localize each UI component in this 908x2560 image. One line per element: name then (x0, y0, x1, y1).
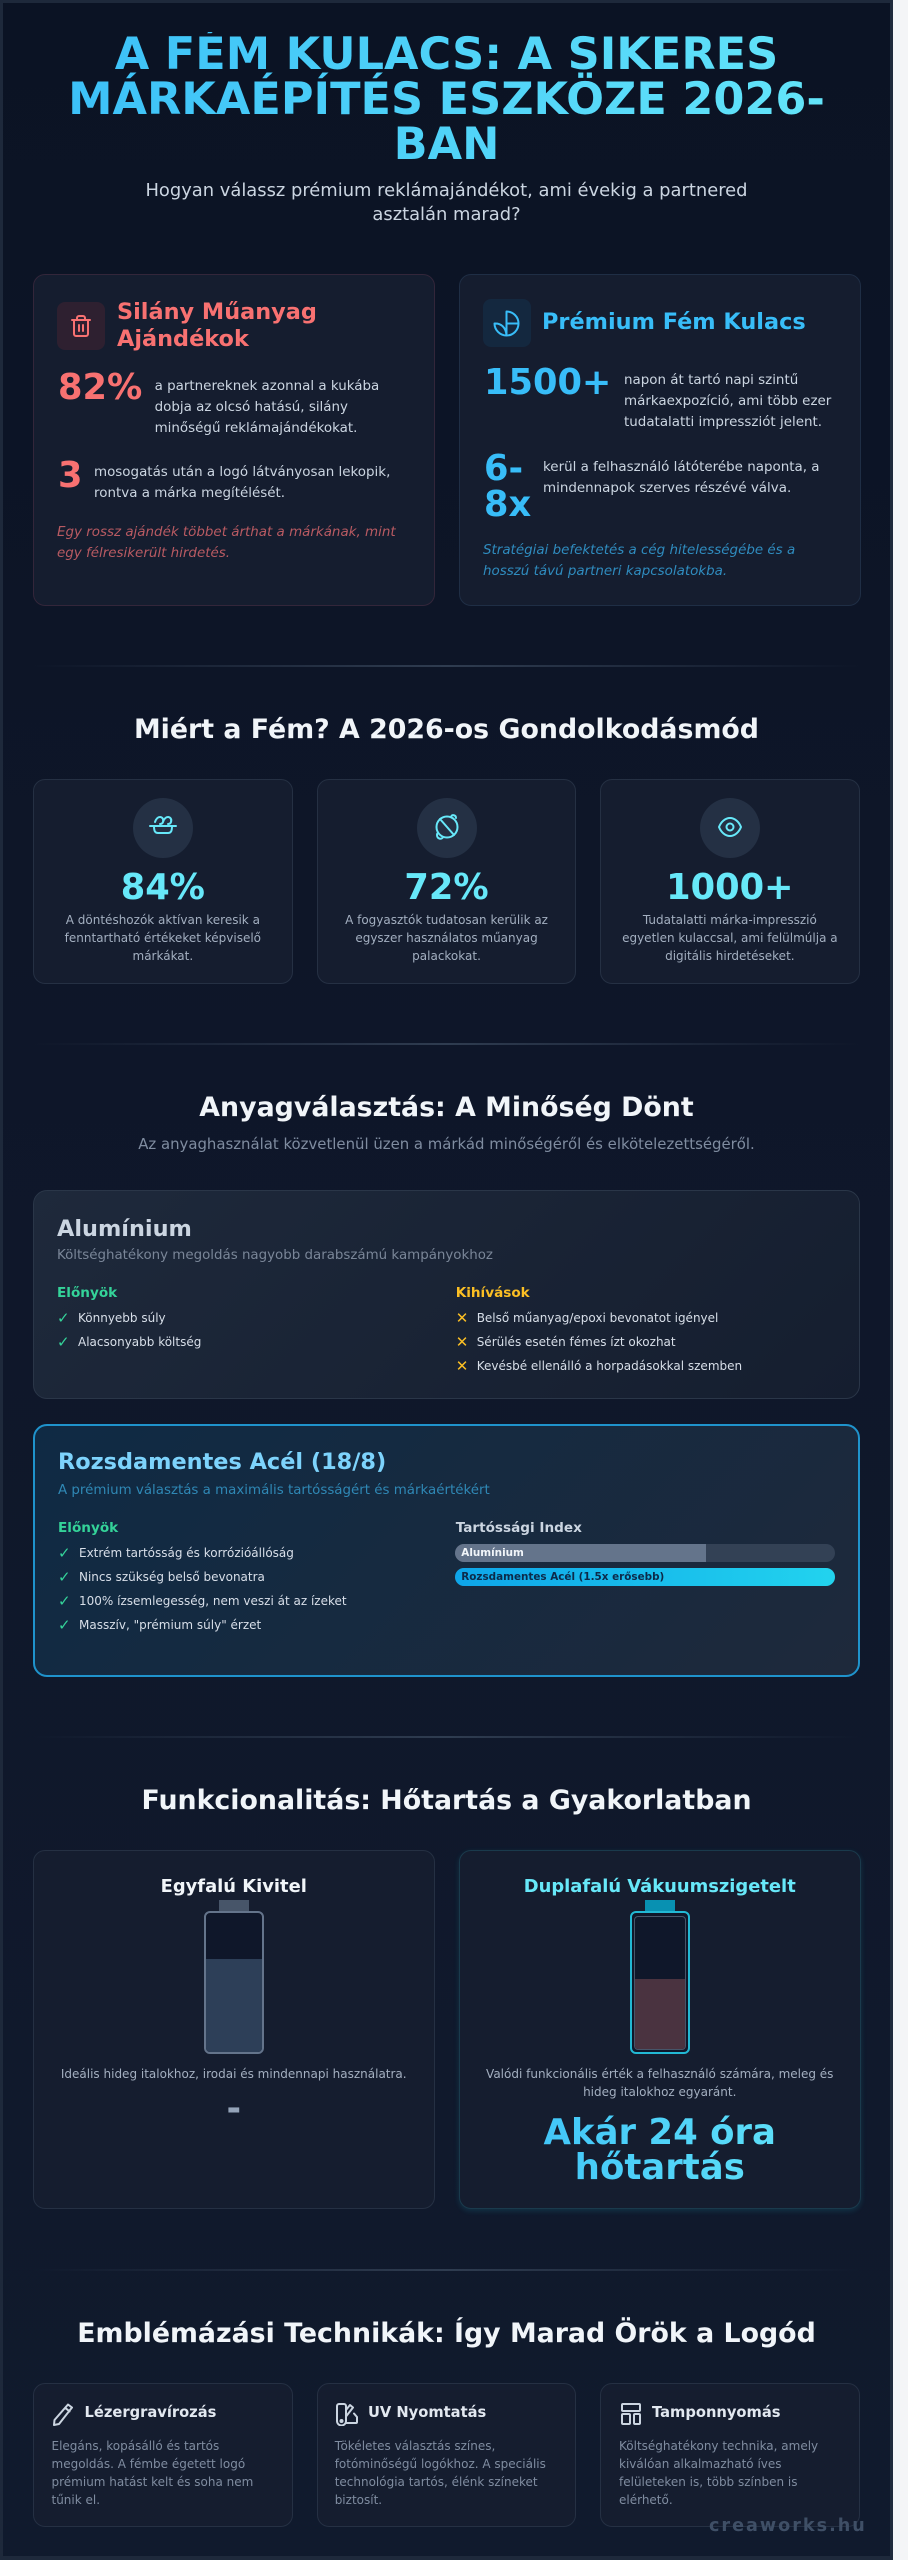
stat: 6-8x (484, 448, 531, 524)
list: kihívások: Sérülés esetén fémes ízt okozhat (477, 1335, 676, 1349)
heading: Prémium Fém Kulacs (542, 308, 806, 334)
bar: rozsdamentes acél: Rozsdamentes Acél (1.5x erősebb) (461, 1571, 664, 1583)
stat: 82%: 82% (58, 367, 142, 408)
description: technológia tartós, élénk színeket (335, 2475, 538, 2489)
title: Egyfalú Kivitel (161, 1876, 307, 1897)
list: előnyök: ✓ (57, 1333, 70, 1351)
list: előnyök: ✓ (57, 1309, 70, 1327)
icon: pen (53, 2404, 73, 2426)
card: uv nyomtatás (317, 2383, 576, 2527)
stat text: dobja az olcsó hatású, silány (155, 400, 348, 414)
description (486, 2067, 833, 2099)
description: elérhető. (619, 2493, 673, 2507)
title: UV Nyomtatás (368, 2404, 486, 2421)
description (622, 913, 838, 963)
durability heading: Tartóssági Index (456, 1520, 582, 1536)
list: kihívások: ✕ (456, 1309, 468, 1327)
icon: no plastic (417, 798, 477, 858)
stat text: minőségű reklámajándékokat. (155, 420, 357, 436)
card: lézergravírozás (33, 2383, 293, 2527)
list: előnyök: Előnyök (57, 1285, 117, 1301)
description: Ideális hideg italokhoz, irodai és mindennapi használatra. (61, 2067, 407, 2081)
panel: prémium fém kulacs (459, 274, 860, 606)
description: A döntéshozók aktívan keresik a (66, 913, 260, 927)
panel: rozsdamentes acél (33, 1424, 860, 1677)
heading: miért a fém: Miért a Fém? A 2026-os Gondolkodásmód (134, 714, 759, 744)
note: Stratégiai befektetés a cég hitelességébe és a (483, 542, 795, 558)
subheading: Az anyaghasználat közvetlenül üzen a márkád minőségéről és elkötelezettségéről. (138, 1135, 755, 1153)
list: kihívások: ✕ (456, 1357, 468, 1375)
number: 84% (121, 867, 205, 908)
list: előnyök: Extrém tartósság és korrózióállóság (79, 1546, 294, 1560)
subtitle: asztalán marad? (372, 204, 521, 225)
number: 1000+ (666, 867, 794, 908)
note: egy félresikerült hirdetés. (57, 546, 230, 560)
icon: recycling basin (133, 798, 193, 858)
title: Duplafalú Vákuumszigetelt (524, 1876, 796, 1897)
description (64, 913, 261, 963)
list: előnyök: ✓ (58, 1592, 71, 1610)
list: előnyök: Nincs szükség belső bevonatra (79, 1570, 265, 1584)
inner wall (634, 1916, 686, 2050)
stat text (94, 465, 390, 501)
description: Elegáns, kopásálló és tartós (52, 2439, 219, 2453)
subtitle: Hogyan válassz prémium reklámajándékot, ami évekig a partnered (145, 180, 748, 201)
body (204, 1911, 264, 2054)
title: A FÉM KULACS: A SIKERES (115, 28, 778, 80)
stat text (155, 378, 379, 436)
stat text: márkaexpozíció, ami több ezer (624, 394, 831, 408)
description: prémium hatást kelt és soha nem (52, 2475, 253, 2489)
liquid (206, 1959, 262, 2052)
number: 72% (404, 867, 489, 908)
big claim: hőtartás (575, 2147, 745, 2188)
list: kihívások: Belső műanyag/epoxi bevonatot igényel (477, 1311, 718, 1325)
title (0, 32, 893, 167)
description: Tökéletes választás színes, (335, 2439, 495, 2453)
stat: 1500+: 1500+ (484, 362, 611, 402)
stat text: kerül a felhasználó látóterébe naponta, a (543, 460, 820, 474)
bottle: single wall (204, 1900, 264, 2054)
heading: anyagválasztás: Anyagválasztás: A Minőség Dönt (199, 1092, 694, 1122)
description: digitális hirdetéseket. (665, 949, 795, 963)
description: egyszer használatos műanyag (355, 931, 538, 945)
description: Tudatalatti márka-impresszió (643, 913, 817, 927)
stat: 3: 3 (58, 455, 82, 496)
list: előnyök (58, 1520, 347, 1634)
list: kihívások: Kihívások (456, 1285, 530, 1301)
big claim (460, 2115, 860, 2185)
icon: eye (700, 798, 760, 858)
description: A fogyasztók tudatosan kerülik az (345, 913, 548, 927)
list: előnyök: Masszív, "prémium súly" érzet (79, 1618, 261, 1632)
title: Alumínium (57, 1216, 192, 1242)
heading: funkcionalitás: Funkcionalitás: Hőtartás a Gyakorlatban (141, 1784, 752, 1816)
body (630, 1911, 690, 2054)
stat text: a partnereknek azonnal a kukába (155, 378, 379, 394)
stat text: tudatalatti impressziót jelent. (624, 414, 822, 430)
description: fotóminőségű logókhoz. A speciális (335, 2457, 546, 2471)
icon: swatch (336, 2403, 358, 2426)
note (57, 524, 396, 560)
description (619, 2439, 818, 2507)
card: 72% (317, 779, 576, 984)
title: Rozsdamentes Acél (18/8) (58, 1449, 386, 1475)
icon: trash (57, 302, 105, 350)
card: 84% (33, 779, 293, 984)
card: 1000+ (600, 779, 860, 984)
note: hosszú távú partneri kapcsolatokba. (483, 564, 727, 578)
description: palackokat. (412, 949, 481, 963)
description: hideg italokhoz egyaránt. (583, 2085, 736, 2099)
description (52, 2439, 253, 2507)
heading: emblémázás: Emblémázási Technikák: Így Marad Örök a Logód (77, 2318, 816, 2348)
bar: rozsdamentes acél (455, 1568, 835, 1586)
description (334, 2439, 546, 2507)
title: Tamponnyomás (652, 2404, 780, 2421)
list: kihívások: Kevésbé ellenálló a horpadásokkal szemben (477, 1359, 742, 1373)
stat text: mosogatás után a logó látványosan lekopik, (94, 465, 390, 480)
list: kihívások (456, 1285, 742, 1375)
description: fenntartható értékeket képviselő (65, 931, 261, 945)
list: előnyök: ✓ (58, 1616, 71, 1634)
list: előnyök: ✓ (58, 1568, 71, 1586)
list: előnyök: ✓ (58, 1544, 71, 1562)
big claim: Akár 24 óra (543, 2112, 776, 2153)
description: Költséghatékony technika, amely (619, 2439, 818, 2453)
list: előnyök: 100% ízsemlegesség, nem veszi át az ízeket (79, 1594, 347, 1608)
subtitle: A prémium választás a maximális tartósságért és márkaértékért (58, 1482, 490, 1498)
panel: silány műanyag ajándékok (33, 274, 434, 606)
icon: premium (483, 299, 531, 347)
title: Lézergravírozás (84, 2404, 216, 2421)
panel: alumínium (33, 1190, 860, 1399)
description: felületeken is, több színben is (619, 2475, 797, 2489)
subtitle (145, 180, 748, 225)
description: tűnik el. (52, 2493, 100, 2507)
list: előnyök: Alacsonyabb költség (78, 1335, 201, 1349)
cap (219, 1900, 249, 1913)
list: kihívások: ✕ (456, 1333, 468, 1351)
watermark: creaworks.hu (709, 2516, 867, 2536)
subtitle: Költséghatékony megoldás nagyobb darabszámú kampányokhoz (57, 1248, 493, 1263)
stat text: mindennapok szerves részévé válva. (543, 480, 791, 496)
note: Egy rossz ajándék többet árthat a márkának, mint (57, 524, 396, 540)
description: kiválóan alkalmazható íves (619, 2457, 782, 2471)
description: Valódi funkcionális érték a felhasználó számára, meleg és (486, 2067, 833, 2081)
stat: 6-8x: 8x (484, 484, 531, 524)
stat: 6-8x: 6- (484, 448, 523, 488)
heading: Ajándékok (117, 326, 249, 352)
dash value: - (226, 2088, 241, 2129)
description: egyetlen kulaccsal, ami felülmúlja a (622, 931, 838, 945)
list: előnyök (57, 1285, 201, 1351)
bar: alumínium: Alumínium (461, 1547, 524, 1559)
stat text: napon át tartó napi szintű (624, 372, 798, 388)
stat text: rontva a márka megítélését. (94, 486, 285, 501)
description: biztosít. (335, 2493, 382, 2507)
description: megoldás. A fémbe égetett logó (52, 2457, 245, 2471)
title: MÁRKAÉPÍTÉS ESZKÖZE 2026- (68, 73, 825, 125)
liquid (635, 1979, 685, 2049)
bottle: double wall (630, 1900, 690, 2054)
card: tamponnyomás (600, 2383, 860, 2527)
panel: duplafalú (459, 1850, 860, 2209)
description: márkákat. (132, 949, 193, 963)
stat text (543, 460, 820, 496)
list: előnyök: Előnyök (58, 1520, 118, 1536)
heading: Silány Műanyag (117, 298, 317, 324)
title: BAN (394, 118, 499, 170)
icon: layout (621, 2403, 641, 2425)
heading (117, 298, 317, 352)
bar: alumínium (455, 1544, 835, 1562)
panel: egyfalú (33, 1850, 434, 2209)
cap (645, 1900, 675, 1913)
description (345, 913, 548, 963)
note (483, 542, 795, 578)
stat text (624, 372, 832, 430)
list: előnyök: Könnyebb súly (78, 1311, 166, 1325)
